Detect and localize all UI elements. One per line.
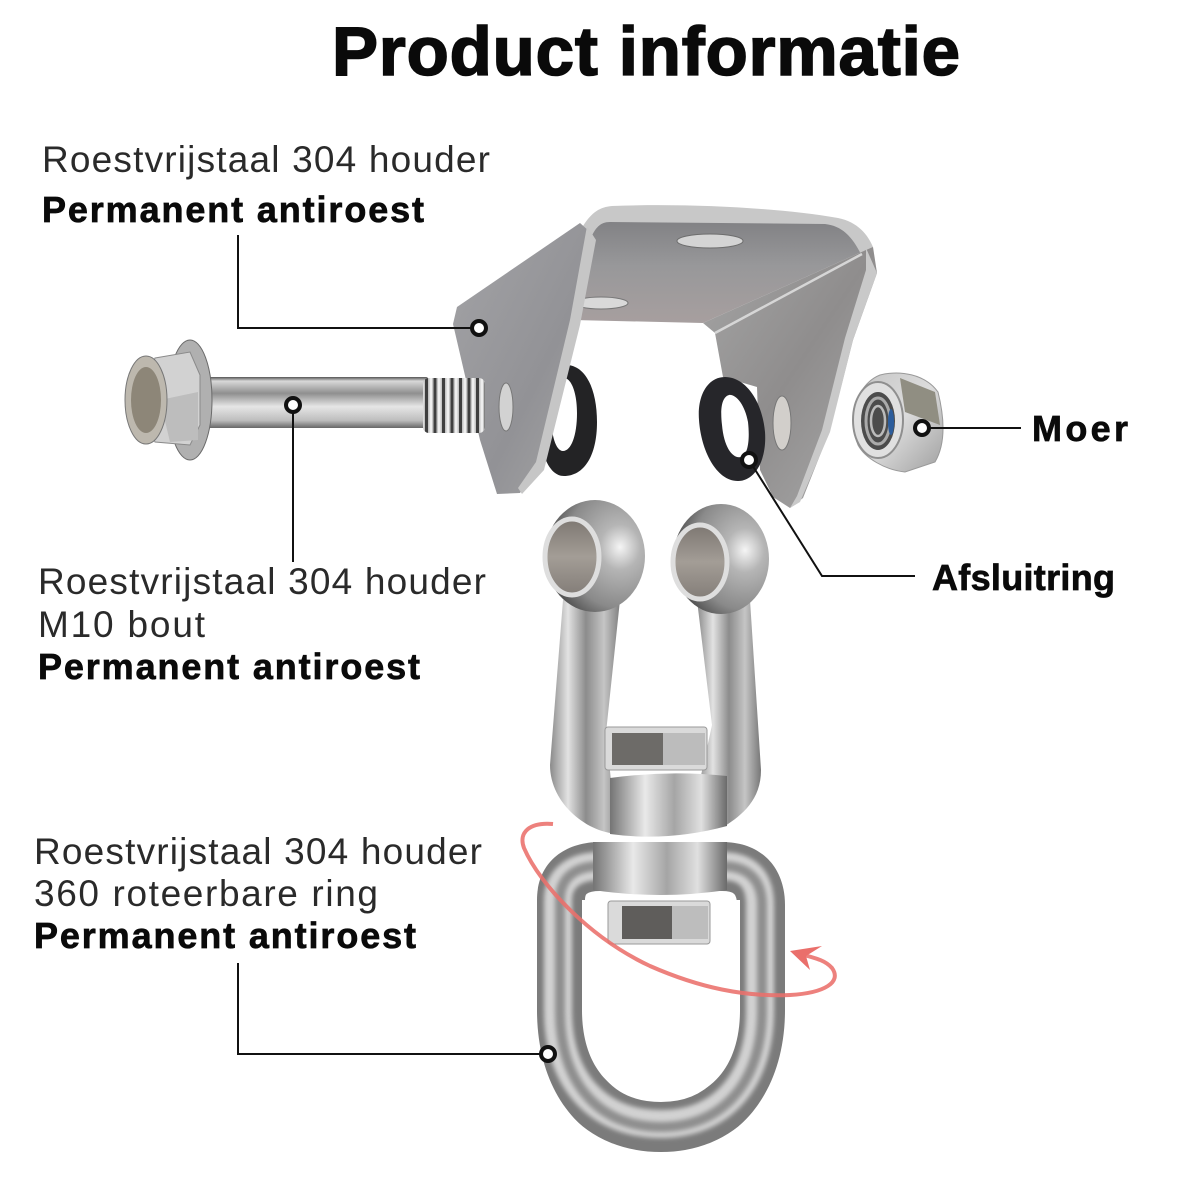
ring tube	[558, 866, 762, 1127]
lower nut	[608, 901, 710, 944]
icon: red rotation arrow	[522, 824, 835, 995]
text: ring label: Roestvrijstaal 304 houder	[34, 831, 482, 872]
product: swivel ring	[558, 842, 762, 1127]
text: bolt label: Permanent antiroest	[38, 646, 420, 687]
product: nut	[853, 373, 943, 472]
text: ring label: 360 roteerbare ring	[34, 873, 378, 914]
text: ring label: Permanent antiroest	[34, 915, 416, 956]
product: bolt	[125, 340, 485, 460]
upper collar	[610, 773, 727, 837]
top nut	[605, 727, 707, 770]
product: swivel fork	[545, 500, 769, 837]
text: bracket label	[42, 139, 490, 230]
mounting holes	[677, 234, 743, 248]
callout: washer	[742, 453, 1115, 598]
callout: nut	[915, 408, 1128, 449]
back plate	[573, 210, 866, 323]
callout: bolt	[38, 398, 486, 687]
product: bracket	[453, 205, 877, 508]
product: rear washer	[539, 365, 597, 476]
text: bolt label: M10 bout	[38, 604, 206, 645]
callout: bracket	[42, 139, 490, 335]
left flange	[453, 223, 590, 494]
title: Product informatie	[332, 13, 960, 90]
callout: ring	[34, 831, 555, 1061]
text: bolt label: Roestvrijstaal 304 houder	[38, 561, 486, 602]
product: front washer	[699, 377, 765, 481]
flange holes	[499, 383, 513, 431]
right flange	[703, 247, 877, 508]
text: ring label	[34, 831, 482, 956]
text: bolt label	[38, 561, 486, 687]
text: washer label: Afsluitring	[932, 557, 1115, 598]
text: nut label: Moer	[1032, 408, 1128, 449]
text: bracket label: Permanent antiroest	[42, 189, 424, 230]
lower collar	[593, 842, 727, 895]
top rim	[583, 205, 873, 256]
text: bracket label: Roestvrijstaal 304 houder	[42, 139, 490, 180]
